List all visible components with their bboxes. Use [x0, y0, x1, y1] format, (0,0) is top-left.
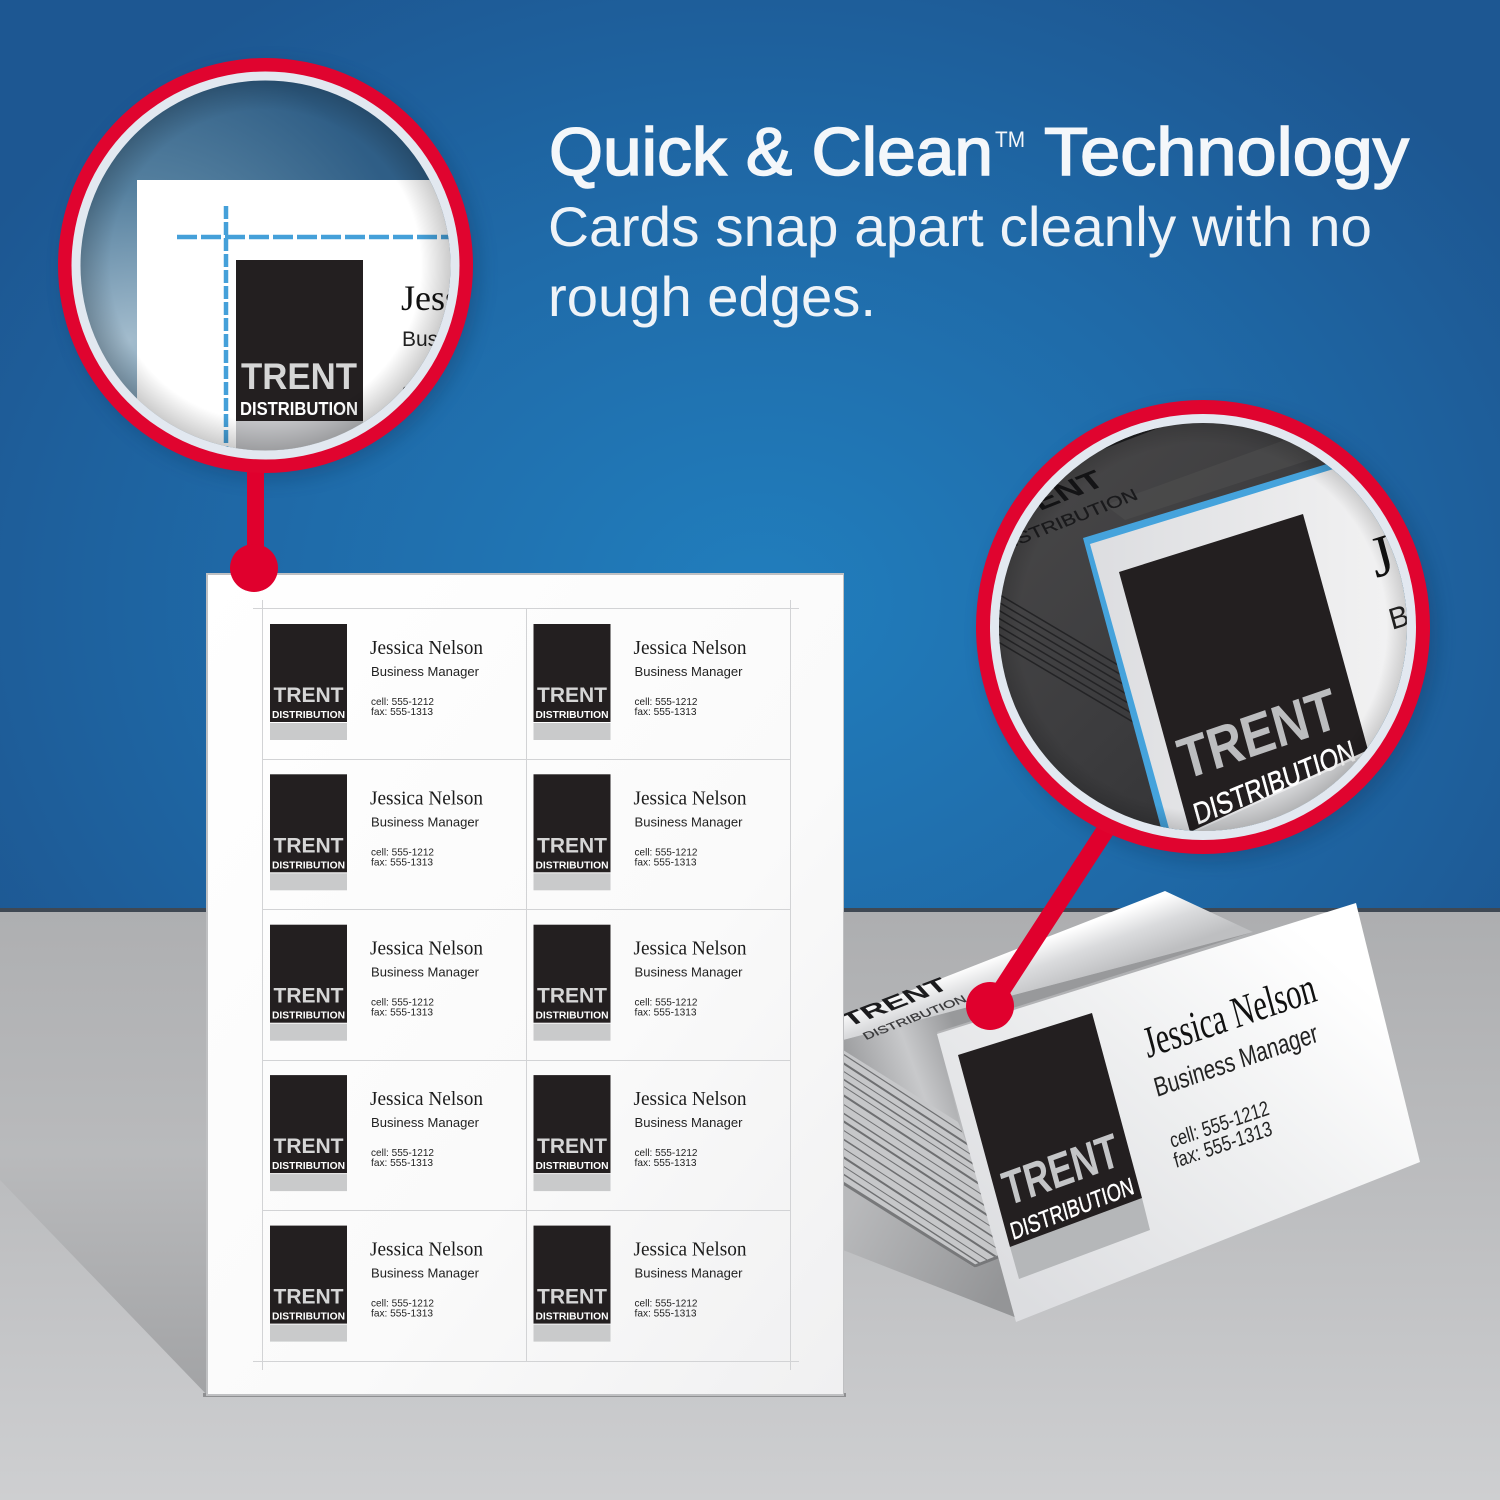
- left magnifier callout: sheet corner: [58, 58, 501, 592]
- subtitle: rough edges.: [548, 265, 876, 328]
- card 4: Jessica Nelson: [634, 787, 746, 809]
- card 1: fax: 555-1313: [371, 706, 433, 718]
- card 6: Business Manager: [634, 965, 743, 980]
- card 6: fax: 555-1313: [634, 1007, 697, 1019]
- right magnifier callout: card stack close-up: DISTRIBUTION: [1190, 735, 1359, 832]
- card 7: TRENT: [274, 1135, 344, 1158]
- card 8: TRENT: [537, 1135, 607, 1158]
- card 8: [534, 1075, 746, 1191]
- front business card: TRENT: [997, 1124, 1125, 1217]
- card 1: cell: 555-1212: [371, 696, 434, 708]
- card 9: cell: 555-1212: [371, 1298, 434, 1310]
- card 5: cell: 555-1212: [371, 997, 434, 1009]
- grey table surface: [0, 908, 1500, 1500]
- front business card: fax: 555-1313: [1171, 1117, 1275, 1173]
- card 10: DISTRIBUTION: [536, 1311, 608, 1323]
- right magnifier callout: card stack close-up: DISTRIBUTION: [993, 485, 1141, 555]
- card 10: Business Manager: [634, 1266, 743, 1281]
- card 5: fax: 555-1313: [371, 1007, 433, 1019]
- card 3: DISTRIBUTION: [272, 859, 345, 871]
- card 10: Jessica Nelson: [634, 1239, 746, 1261]
- card 3: fax: 555-1313: [371, 856, 433, 868]
- card 1: Business Manager: [371, 664, 480, 679]
- card 2: DISTRIBUTION: [536, 709, 608, 721]
- card 7: [270, 1075, 483, 1191]
- card 4: DISTRIBUTION: [536, 859, 608, 871]
- card 6: TRENT: [537, 985, 607, 1008]
- title: Quick & Clean: [549, 114, 993, 190]
- left magnifier callout: sheet corner: Business: [402, 328, 487, 351]
- front business card: [937, 903, 1420, 1322]
- card 4: [534, 774, 746, 890]
- left magnifier callout: sheet corner: TRENT: [241, 356, 357, 397]
- card 2: Jessica Nelson: [634, 637, 746, 659]
- card 8: Jessica Nelson: [634, 1088, 746, 1110]
- card 5: DISTRIBUTION: [272, 1010, 345, 1022]
- card 2: Business Manager: [634, 664, 743, 679]
- right magnifier callout: card stack close-up: ENT: [1024, 465, 1111, 516]
- card 3: Jessica Nelson: [370, 787, 483, 809]
- card 1: TRENT: [274, 684, 344, 707]
- right magnifier callout: card stack close-up: [966, 400, 1441, 1030]
- card 1: [270, 624, 483, 740]
- front business card: Jessica Nelson: [1138, 963, 1321, 1068]
- card 5: TRENT: [274, 985, 344, 1008]
- title: Technology: [1044, 114, 1409, 190]
- card 7: Jessica Nelson: [370, 1088, 483, 1110]
- left magnifier callout: sheet corner: cell: [402, 382, 426, 399]
- card 9: DISTRIBUTION: [272, 1311, 345, 1323]
- card 8: Business Manager: [634, 1115, 743, 1130]
- card 3: Business Manager: [371, 814, 480, 829]
- front business card: Business Manager: [1151, 1018, 1321, 1103]
- card 10: [534, 1226, 746, 1342]
- card 3: [270, 774, 483, 890]
- card 10: cell: 555-1212: [634, 1298, 698, 1310]
- title: TM: [995, 127, 1025, 152]
- card 8: cell: 555-1212: [634, 1147, 698, 1159]
- card 9: [270, 1226, 483, 1342]
- card 4: fax: 555-1313: [634, 856, 697, 868]
- card 7: Business Manager: [371, 1115, 480, 1130]
- card 2: cell: 555-1212: [634, 696, 698, 708]
- card 8: DISTRIBUTION: [536, 1160, 608, 1172]
- card 7: cell: 555-1212: [371, 1147, 434, 1159]
- front business card: DISTRIBUTION: [1008, 1173, 1137, 1246]
- card 2: TRENT: [537, 684, 607, 707]
- blue wall background: [0, 0, 1500, 909]
- card 3: cell: 555-1212: [371, 846, 434, 858]
- card 5: Jessica Nelson: [370, 938, 483, 960]
- card 4: cell: 555-1212: [634, 846, 698, 858]
- card 2: [534, 624, 746, 740]
- card 1: Jessica Nelson: [370, 637, 483, 659]
- title: [549, 114, 1409, 190]
- card 2: fax: 555-1313: [634, 706, 697, 718]
- card 5: [270, 925, 483, 1041]
- card 7: DISTRIBUTION: [272, 1160, 345, 1172]
- subtitle: [548, 195, 1372, 328]
- card 4: Business Manager: [634, 814, 743, 829]
- right magnifier callout: card stack close-up: TRENT: [1171, 676, 1344, 793]
- card 3: TRENT: [274, 834, 344, 857]
- card 1: DISTRIBUTION: [272, 709, 345, 721]
- left magnifier callout: sheet corner: Jessica: [401, 278, 501, 318]
- connector stem and dot to sheet: [230, 460, 278, 592]
- business card stack: TRENT: [836, 974, 954, 1031]
- card 9: TRENT: [274, 1286, 344, 1309]
- card 9: Jessica Nelson: [370, 1239, 483, 1261]
- card 4: TRENT: [537, 834, 607, 857]
- card 9: Business Manager: [371, 1266, 480, 1281]
- printable card sheet: [203, 573, 846, 1397]
- card 6: Jessica Nelson: [634, 938, 746, 960]
- business card stack: DISTRIBUTION: [860, 993, 969, 1042]
- card 6: cell: 555-1212: [634, 997, 698, 1009]
- card 5: Business Manager: [371, 965, 480, 980]
- left magnifier callout: sheet corner: DISTRIBUTION: [240, 398, 358, 419]
- subtitle: Cards snap apart cleanly with no: [548, 195, 1372, 258]
- card 6: DISTRIBUTION: [536, 1010, 608, 1022]
- card 10: fax: 555-1313: [634, 1308, 697, 1320]
- business card stack: [836, 891, 1253, 1318]
- connector stem and dot to business card: [966, 825, 1113, 1030]
- card 6: [534, 925, 746, 1041]
- card 7: fax: 555-1313: [371, 1157, 433, 1169]
- card 10: TRENT: [537, 1286, 607, 1309]
- front business card: cell: 555-1212: [1167, 1097, 1272, 1153]
- card 8: fax: 555-1313: [634, 1157, 697, 1169]
- card 9: fax: 555-1313: [371, 1308, 433, 1320]
